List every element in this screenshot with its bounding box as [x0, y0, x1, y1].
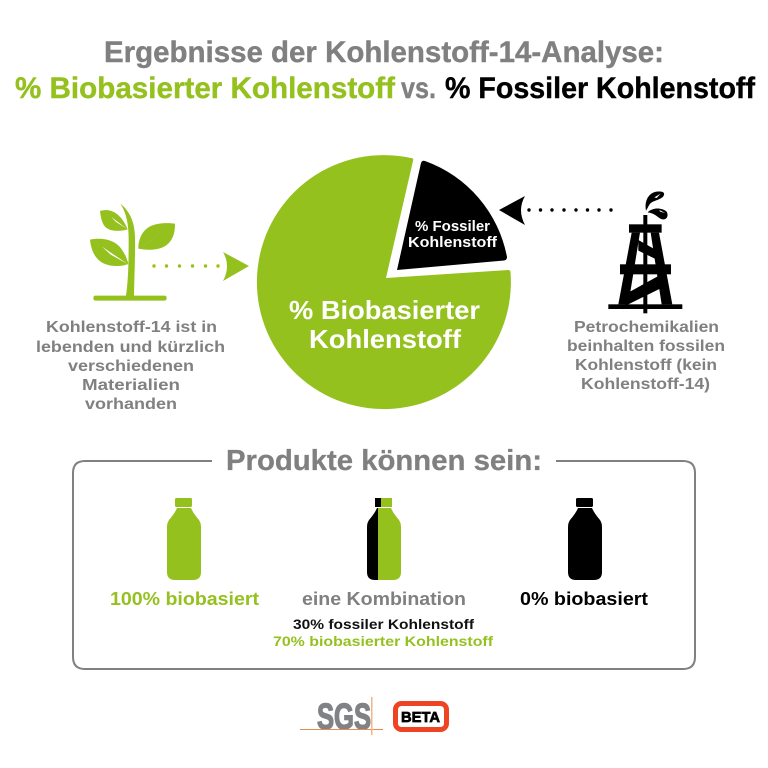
- text: plant description: lebenden und kürzlich: [36, 339, 225, 356]
- logo: BETA: [396, 704, 446, 730]
- text: plant description: Kohlenstoff-14 ist in: [46, 319, 217, 336]
- panel: products: [73, 445, 695, 669]
- icon: mixed bottle: [367, 498, 401, 580]
- label: 30% fossil: 30% fossiler Kohlenstoff: [293, 616, 474, 632]
- text: plant description: vorhanden: [85, 396, 177, 413]
- label: 70% biobased: 70% biobasierter Kohlenstoff: [273, 633, 493, 649]
- text: petrochemical description: beinhalten fossilen: [567, 338, 725, 355]
- icon: plant: [90, 204, 175, 301]
- panel frame: [73, 461, 695, 669]
- title: % Biobasierter Kohlenstoff: [15, 72, 396, 105]
- title: [15, 36, 756, 105]
- text: plant description: verschiedenen: [68, 358, 194, 375]
- icon: black bottle: [568, 498, 602, 580]
- text: petrochemical description: Kohlenstoff (kein: [575, 357, 717, 374]
- pie label: fossil: Kohlenstoff: [408, 235, 497, 251]
- label: 100% biobased: 100% biobasiert: [110, 589, 259, 609]
- pie label: biobased: [289, 295, 480, 354]
- icon: green bottle: [167, 498, 201, 580]
- arrow: fossil to pie: [499, 196, 613, 225]
- text: petrochemical description: Kohlenstoff-14): [581, 376, 710, 393]
- pie label: biobased: Kohlenstoff: [309, 324, 461, 354]
- logo: SGS: SGS: [317, 696, 371, 737]
- panel heading: Produkte können sein:: [226, 445, 542, 477]
- title: vs.: [401, 72, 436, 105]
- arrow: plant to pie: [152, 252, 249, 281]
- text: plant description: [36, 319, 225, 413]
- label: combination: eine Kombination: [302, 589, 466, 609]
- pie label: fossil: [408, 219, 497, 251]
- label: 0% biobased: 0% biobasiert: [520, 589, 648, 609]
- pie chart: [257, 155, 511, 409]
- pie slice: fossil: [397, 161, 507, 270]
- title: Ergebnisse der Kohlenstoff-14-Analyse:: [104, 36, 664, 69]
- title: % Fossiler Kohlenstoff: [445, 72, 756, 105]
- text: plant description: Materialien: [82, 377, 180, 394]
- pie label: biobased: % Biobasierter: [289, 295, 480, 325]
- text: petrochemical description: [567, 319, 725, 393]
- icon: oil rig: [608, 191, 682, 313]
- pie slice: biobased: [257, 155, 511, 409]
- text: petrochemical description: Petrochemikalien: [574, 319, 719, 336]
- pie label: fossil: % Fossiler: [415, 219, 490, 235]
- logo: BETA: BETA: [401, 709, 440, 726]
